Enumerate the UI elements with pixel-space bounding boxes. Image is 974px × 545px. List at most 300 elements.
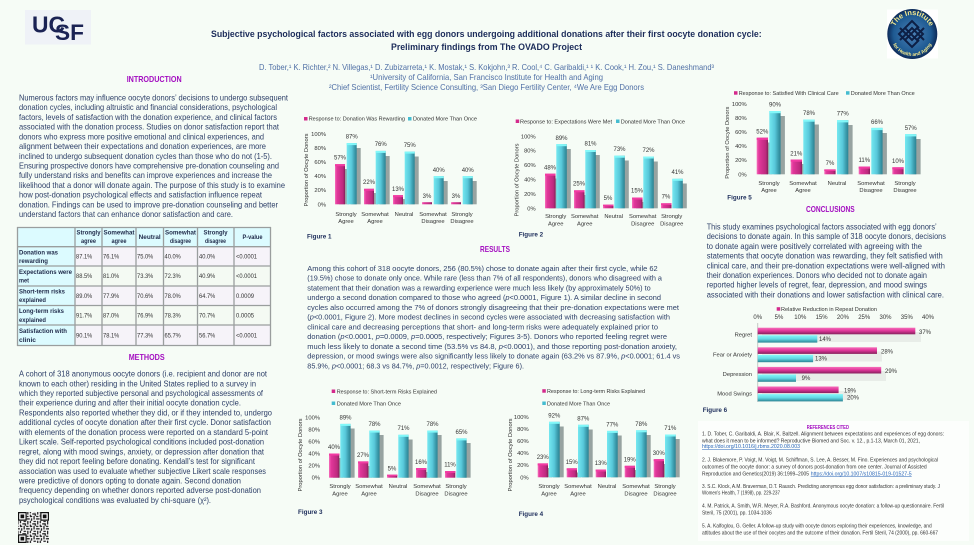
text: introduction: alignment between their expectations and donation experiences, are more bbox=[19, 142, 266, 151]
text: methods: frequency depending on whether donors reported adverse post-donation bbox=[19, 486, 261, 495]
logo: The Institute for Health and Aging: for Health and Aging bbox=[893, 43, 932, 56]
text: methods: known to each other) residing in the United States replied to a survey in bbox=[19, 379, 256, 388]
text: references: outcomes of the oocyte donor: a survey of donors post-donation from one center. Journal of Assisted bbox=[702, 465, 927, 471]
bar chart: figure 2: 72% bbox=[642, 148, 655, 154]
table: agreement vs repeat donation: P-value bbox=[242, 234, 263, 241]
bar chart: figure 6: Depression bbox=[723, 372, 752, 378]
bar chart: figure 1: 13% bbox=[392, 187, 405, 193]
bar chart: figure 2: Disagree bbox=[631, 222, 654, 228]
bar chart: figure 5: 90% bbox=[769, 102, 782, 108]
text: conclusions bbox=[707, 222, 946, 300]
text: methods: association was used to evaluate whether subjective Likert scale responses bbox=[19, 467, 266, 476]
text: conclusions: This study examines psychological factors associated with egg donors’ bbox=[707, 222, 937, 232]
bar chart: figure 4: Neutral bbox=[598, 484, 616, 490]
table: agreement vs repeat donation: 91.7% bbox=[76, 312, 93, 320]
text: results: clinical care and decreasing perceptions that short- and long-term risks were adequately explained prior to bbox=[307, 322, 658, 331]
bar chart: figure 1: 87% bbox=[346, 134, 358, 140]
bar chart: figure 6 bbox=[703, 307, 935, 414]
table: agreement vs repeat donation: 77.3% bbox=[137, 332, 154, 340]
text: methods: their experience during and after their initial oocyte donation cycle. bbox=[19, 399, 241, 408]
bar chart: figure 2: 73% bbox=[613, 147, 626, 153]
bar chart: figure 4: 100% bbox=[514, 415, 529, 421]
bar chart: figure 2: Disagree bbox=[660, 222, 683, 228]
table: agreement vs repeat donation: 0.0005 bbox=[236, 312, 254, 320]
text: references: 4. M. Patrick, A. Smith, W.R. Meyer, R.A. Bashford. Anonymous oocyte donation: a follow-up questionnaire. Fertil bbox=[702, 503, 944, 509]
bar chart: figure 4: 87% bbox=[577, 416, 590, 422]
bar chart: figure 3: Strongly bbox=[445, 484, 467, 490]
bar chart: figure 6: Fear or Anxiety bbox=[713, 352, 752, 358]
text: results: Among this cohort of 318 oocyte donors, 256 (80.5%) chose to donate again after their first cycle, while 62 bbox=[307, 264, 658, 273]
bar chart: figure 4: 13% bbox=[595, 461, 607, 467]
bar chart: figure 4: 19% bbox=[624, 458, 636, 464]
text: methods: they did not report feeling before donating. Kendall’s test for significant bbox=[19, 457, 256, 466]
bar chart: figure 3: 89% bbox=[339, 416, 352, 422]
table: agreement vs repeat donation: 75.0% bbox=[137, 254, 154, 260]
bar chart: figure 5: 11% bbox=[859, 158, 871, 164]
table: agreement vs repeat donation: 40.0% bbox=[164, 254, 181, 260]
text: introduction: inclined to undergo subsequent donation cycles than those who do not (1-5). bbox=[19, 152, 272, 161]
text: introduction: donors who express more positive emotional and clinical experiences, and bbox=[19, 132, 264, 141]
bar chart: figure 5: 7% bbox=[826, 161, 835, 167]
bar chart: figure 1: Proportion of Oocyte Donors bbox=[304, 133, 310, 206]
text: methods: Respondents also reported whether they did, or if they intended to, undergo bbox=[19, 408, 273, 417]
heading: conclusions: CONCLUSIONS bbox=[806, 205, 855, 214]
text: results: donation (p<0.0001, p=0.0009, p=0.0005, respectively; Figures 3-5). Donors who reported feeling regret were bbox=[307, 332, 667, 341]
bar chart: figure 5: Strongly bbox=[758, 181, 780, 187]
bar chart: figure 2: 15% bbox=[631, 188, 644, 194]
text: methods: additional cycles of oocyte donation after their first cycle. Donor satisfaction bbox=[19, 418, 271, 427]
authors and affiliations: D. Tober,¹ K. Richter,² N. Villegas,¹ D. Zubizarreta,¹ K. Mostak,¹ S. Kokjohn,³ R. Cool,⁴ C. Garibaldi,¹ ¹ K. Cook,¹ H. Zou,¹ S. Daneshmand³ bbox=[259, 63, 714, 72]
authors and affiliations bbox=[259, 63, 714, 92]
bar chart: figure 5: Disagree bbox=[859, 188, 883, 194]
table: agreement vs repeat donation: clinic bbox=[19, 337, 37, 344]
text: references: Women's Health, 7 (1998), pp. 229-237 bbox=[702, 490, 780, 496]
bar chart: figure 4: 77% bbox=[606, 422, 619, 428]
table: agreement vs repeat donation: 76.1% bbox=[103, 254, 120, 260]
bar chart: figure 6: 10% bbox=[794, 315, 807, 321]
bar chart: figure 1: Disagree bbox=[450, 219, 474, 225]
bar chart: figure 3: 80% bbox=[308, 427, 320, 433]
bar chart: figure 4: Somewhat bbox=[622, 484, 650, 490]
bar chart: figure 4: 92% bbox=[548, 414, 561, 420]
bar chart: figure 6: 28% bbox=[881, 350, 894, 356]
bar chart: figure 6: Mood Swings bbox=[717, 392, 752, 398]
table: agreement vs repeat donation: 78.3% bbox=[164, 312, 181, 320]
bar chart: figure 5: Somewhat bbox=[789, 181, 817, 187]
bar chart: figure 4: Disagree bbox=[624, 492, 648, 498]
legend: figure 3: Donated More Than Once bbox=[337, 401, 401, 407]
text: methods: with elements of the donation process were reported on a standard 5-point bbox=[18, 428, 269, 437]
table: agreement vs repeat donation: explained bbox=[19, 297, 46, 304]
bar chart: figure 4: Agree bbox=[541, 492, 557, 498]
title bbox=[211, 29, 762, 52]
bar chart: figure 3: Neutral bbox=[389, 484, 407, 490]
legend: figure 1 bbox=[304, 117, 477, 123]
bar chart: figure 3: 11% bbox=[444, 462, 456, 468]
bar chart: figure 5: 10% bbox=[892, 159, 905, 165]
text: methods: which they reported subjective personal and psychological assessments of bbox=[18, 389, 264, 398]
bar chart: figure 3: 65% bbox=[455, 430, 468, 436]
text: methods: Likert scale. Self-reported psychological conditions included post-donation bbox=[19, 438, 264, 447]
text: results: 85.9%, p<0.0001; 68.3 vs 84.7%, p=0.0012, respectively; Figure 6). bbox=[307, 361, 524, 370]
table: agreement vs repeat donation: 87.0% bbox=[103, 312, 120, 320]
bar chart: figure 1: Strongly bbox=[335, 212, 357, 218]
bar chart: figure 5: 100% bbox=[732, 102, 747, 108]
table: agreement vs repeat donation: 78.1% bbox=[103, 332, 120, 340]
table: agreement vs repeat donation: Long-term risks bbox=[19, 308, 64, 315]
bar chart: figure 3: 40% bbox=[308, 452, 320, 458]
text: results: (p<0.0001, Figure 2). More modest declines in second cycles were associated with decreasing satisfaction with bbox=[307, 313, 670, 322]
text: conclusions: associated with their donations and lower satisfaction with clinical care. bbox=[707, 290, 944, 300]
icon: QR code bbox=[18, 512, 49, 543]
bar chart: figure 4: 23% bbox=[537, 455, 549, 461]
table: agreement vs repeat donation: 0.0009 bbox=[236, 293, 254, 300]
bar chart: figure 2: 48% bbox=[544, 166, 557, 172]
text: introduction: donation. Findings can be used to improve pre-donation counseling and better bbox=[19, 200, 278, 209]
table: agreement vs repeat donation: 64.7% bbox=[199, 293, 216, 300]
table: agreement vs repeat donation: 40.0% bbox=[199, 254, 216, 260]
bar chart: figure 5: 0% bbox=[738, 172, 747, 178]
bar chart: figure 4: 0% bbox=[520, 475, 529, 481]
text: references bbox=[702, 432, 944, 536]
bar chart: figure 3 bbox=[298, 389, 471, 516]
bar chart: figure 1: Agree bbox=[367, 219, 383, 225]
references background bbox=[698, 421, 969, 541]
bar chart: figure 4: 15% bbox=[566, 460, 578, 466]
text: references: attitudes about the use of their oocytes and the outcome of their donation. Fertil Steril, 74 (2000), pp. 660-667 bbox=[702, 530, 938, 536]
text: references: https://doi.org/10.1007/s10815-019-01527-5 bbox=[811, 471, 912, 477]
bar chart: figure 6: 35% bbox=[901, 315, 913, 321]
logo: The Institute for Health and Aging: The Institute bbox=[890, 10, 933, 26]
bar chart: figure 4: 78% bbox=[635, 422, 648, 428]
heading: results: RESULTS bbox=[480, 245, 510, 254]
bar chart: figure 4: Strongly bbox=[654, 484, 676, 490]
bar chart: figure 6: 14% bbox=[819, 337, 832, 343]
table: agreement vs repeat donation: <0.0001 bbox=[236, 332, 257, 340]
bar chart: figure 5: 52% bbox=[756, 130, 769, 136]
bar chart: figure 4: 20% bbox=[517, 463, 529, 469]
heading: references cited: REFERENCES CITED bbox=[807, 425, 849, 431]
title: Subjective psychological factors associated with egg donors undergoing additional donations after their first oocyte donation cycle: bbox=[211, 29, 762, 39]
table: agreement vs repeat donation: rewarding bbox=[19, 258, 48, 265]
legend: figure 6: Relative Reduction in Repeat Donation bbox=[781, 307, 877, 313]
bar chart: figure 1: 40% bbox=[314, 174, 326, 180]
table: agreement vs repeat donation: 87.1% bbox=[76, 254, 93, 260]
bar chart: figure 1: 40% bbox=[462, 168, 474, 174]
bar chart: figure 1: 40% bbox=[433, 168, 445, 174]
logo: The Institute for Health and Aging bbox=[887, 9, 938, 59]
bar chart: figure 4: 80% bbox=[517, 427, 529, 433]
bar chart: figure 5: Disagree bbox=[893, 188, 917, 194]
bar chart: figure 2: Agree bbox=[577, 222, 592, 228]
text: conclusions: to donate again were positively correlated with agreeing with the bbox=[707, 242, 922, 251]
bar chart: figure 1: Disagree bbox=[421, 219, 445, 225]
table: agreement vs repeat donation: 78.0% bbox=[164, 293, 181, 300]
bar chart: figure 1: Agree bbox=[338, 219, 354, 225]
bar chart: figure 5: 21% bbox=[790, 152, 803, 158]
table: agreement vs repeat donation: 65.7% bbox=[164, 332, 181, 340]
bar chart: figure 6: 37% bbox=[919, 330, 932, 336]
text: introduction: how post-donation psychological effects and satisfaction influence repeat bbox=[19, 191, 263, 200]
bar chart: figure 3: Somewhat bbox=[355, 484, 383, 490]
text: references: Steril, 75 (2001), pp. 1034-1036 bbox=[702, 510, 772, 516]
table: agreement vs repeat donation: 40.9% bbox=[199, 273, 216, 280]
bar chart: figure 6: 20% bbox=[837, 315, 850, 321]
bar chart: figure 3: Disagree bbox=[444, 492, 468, 498]
bar chart: figure 3: 16% bbox=[415, 460, 428, 466]
table: agreement vs repeat donation: 56.7% bbox=[199, 332, 216, 340]
legend: figure 4: Response to: Long-term Risks Explained bbox=[547, 389, 645, 395]
bar chart: figure 6: 5% bbox=[775, 315, 784, 321]
bar chart: figure 5: 80% bbox=[735, 116, 747, 122]
legend: figure 4: Donated More Than Once bbox=[547, 401, 610, 407]
bar chart: figure 5: 66% bbox=[871, 120, 884, 126]
bar chart: figure 3: 0% bbox=[312, 476, 320, 482]
bar chart: figure 2: Neutral bbox=[604, 214, 623, 220]
bar chart: figure 3: 78% bbox=[426, 422, 439, 428]
bar chart: figure 4: Agree bbox=[570, 492, 586, 498]
bar chart: figure 5: Agree bbox=[795, 188, 811, 194]
authors and affiliations: ²Chief Scientist, Fertility Science Consulting, ³San Diego Fertility Center, ⁴We Are Egg Donors bbox=[329, 83, 644, 92]
text: references: 2. J. Blakemore, P. Voigt, M. Voigt, M. Schiffman, S. Lee, A. Besser, M. Fino. Experiences and psychological bbox=[702, 458, 938, 464]
bar chart: figure 3: 60% bbox=[308, 439, 320, 445]
text: introduction: associated with the donation process. Studies on donor satisfaction report that bbox=[19, 123, 280, 132]
table: agreement vs repeat donation: agree bbox=[112, 238, 127, 245]
table: agreement vs repeat donation: 81.0% bbox=[103, 273, 120, 280]
text: introduction bbox=[19, 94, 289, 219]
bar chart: figure 4: Somewhat bbox=[564, 484, 592, 490]
bar chart: figure 1: 80% bbox=[314, 146, 326, 152]
table: agreement vs repeat donation: disagree bbox=[205, 238, 226, 245]
bar chart: figure 3: Strongly bbox=[329, 484, 351, 490]
text: introduction: factors, levels of satisfaction with the donation experience, and clinical factors bbox=[19, 113, 277, 122]
table: agreement vs repeat donation: 77.9% bbox=[103, 293, 120, 300]
text: references: https://doi.org/10.1016/j.rbms.2020.08.003 bbox=[702, 444, 800, 450]
bar chart: figure 1: 20% bbox=[314, 188, 326, 194]
text: introduction: Numerous factors may influence oocyte donors’ decisions to undergo subsequent bbox=[19, 94, 289, 102]
bar chart: figure 2: 80% bbox=[524, 149, 536, 155]
text: references: what does it mean to be informed? Reproductive Biomed and Soc. v. 12., p.1-13, March 01, 2021, bbox=[702, 438, 920, 444]
table: agreement vs repeat donation: explained bbox=[19, 317, 46, 324]
logo: UCSF bbox=[25, 10, 91, 45]
table: agreement vs repeat donation: 73.3% bbox=[137, 273, 154, 280]
bar chart: figure 2: Somewhat bbox=[629, 214, 657, 220]
text: results: much less likely to donate a second time (53.5% vs 84.8, p<0.0001), and those reporting post-donation anxiety, bbox=[307, 342, 677, 351]
legend: figure 2: Donated More Than Once bbox=[621, 119, 685, 125]
table: agreement vs repeat donation: Strongly bbox=[204, 230, 228, 236]
table: agreement vs repeat donation: agree bbox=[81, 238, 96, 245]
bar chart: figure 2: 5% bbox=[604, 196, 613, 202]
text: methods: regret, along with mood swings, anxiety, or depression after donation that bbox=[19, 447, 265, 456]
text: results: statement that their donation was a rewarding experience were much less likely (by approximately 50%) to bbox=[307, 284, 651, 292]
bar chart: figure 5: 78% bbox=[803, 111, 816, 117]
legend: figure 3 bbox=[332, 389, 437, 407]
bar chart: figure 1: 3% bbox=[423, 194, 432, 200]
bar chart: figure 6: 0% bbox=[753, 315, 763, 321]
table: agreement vs repeat donation: 70.6% bbox=[137, 293, 154, 300]
bar chart: figure 1: 100% bbox=[311, 132, 326, 138]
table: agreement vs repeat donation: Donation was bbox=[19, 250, 58, 256]
text: conclusions: reported higher levels of regret, fear, depression, and mood swings bbox=[707, 281, 927, 290]
bar chart: figure 5 bbox=[725, 91, 921, 202]
bar chart: figure 1: Figure 1 bbox=[307, 233, 332, 240]
logo: UCSF: UC bbox=[32, 12, 65, 38]
bar chart: figure 4: Disagree bbox=[653, 492, 677, 498]
bar chart: figure 4: 60% bbox=[517, 439, 529, 445]
text: references: 3. S.C. Klock, A.M. Braverman, D.T. Rausch. Predicting anonymous egg donor satisfaction: a preliminary study. J bbox=[702, 484, 940, 490]
table: agreement vs repeat donation: 72.3% bbox=[164, 273, 181, 280]
table: agreement vs repeat donation: 89.0% bbox=[76, 293, 93, 300]
legend: figure 5: Donated More Than Once bbox=[851, 91, 915, 97]
table: agreement vs repeat donation: Somewhat bbox=[165, 230, 197, 236]
bar chart: figure 3: 100% bbox=[305, 415, 320, 421]
bar chart: figure 3: Agree bbox=[361, 492, 377, 498]
text: introduction: understand factors that can enhance donor satisfaction and care. bbox=[19, 210, 233, 219]
text: introduction: likelihood that a donor will donate again. The purpose of this study is to examine bbox=[19, 181, 285, 190]
bar chart: figure 6: Figure 6 bbox=[703, 407, 728, 414]
bar chart: figure 2: Strongly bbox=[545, 214, 566, 220]
bar chart: figure 1: 75% bbox=[404, 143, 416, 149]
bar chart: figure 3: Somewhat bbox=[413, 484, 441, 490]
bar chart: figure 3: Figure 3 bbox=[298, 509, 323, 516]
bar chart: figure 2: Somewhat bbox=[571, 214, 599, 220]
table: agreement vs repeat donation: Expectations were bbox=[19, 269, 72, 276]
bar chart: figure 5: 20% bbox=[735, 158, 747, 164]
bar chart: figure 6: 30% bbox=[879, 315, 892, 321]
bar chart: figure 2: Proportion of Oocyte Donors bbox=[515, 143, 521, 216]
bar chart: figure 6: Regret bbox=[735, 333, 752, 339]
bar chart: figure 5: 40% bbox=[735, 144, 747, 150]
text: methods: psychological conditions was evaluated by chi-square (χ²). bbox=[19, 496, 211, 505]
bar chart: figure 2: Agree bbox=[548, 222, 563, 228]
bar chart: figure 1: 60% bbox=[314, 160, 326, 166]
bar chart: figure 2: 0% bbox=[527, 206, 536, 212]
table: agreement vs repeat donation: 90.1% bbox=[76, 332, 93, 340]
bar chart: figure 2: 81% bbox=[584, 142, 597, 148]
legend: figure 2 bbox=[516, 119, 685, 125]
text: results: cycles also occurred among the 7% of donors strongly disagreeing that their pre-donation expectations were met bbox=[307, 303, 680, 312]
authors and affiliations: ¹University of California, San Francisco Institute for Health and Aging bbox=[370, 73, 603, 82]
bar chart: figure 5: Neutral bbox=[828, 181, 846, 187]
bar chart: figure 1: Somewhat bbox=[361, 212, 389, 218]
bar chart: figure 5: 77% bbox=[837, 112, 849, 118]
bar chart: figure 2: 60% bbox=[524, 163, 536, 169]
table: agreement vs repeat donation: disagree bbox=[170, 238, 191, 245]
text: methods: A cohort of 318 anonymous oocyte donors (i.e. recipient and donor are not bbox=[19, 370, 268, 378]
bar chart: figure 1: 0% bbox=[318, 202, 326, 208]
bar chart: figure 4: 30% bbox=[653, 451, 665, 457]
bar chart: figure 4: Strongly bbox=[538, 484, 560, 490]
bar chart: figure 6: 19% bbox=[844, 388, 857, 394]
bar chart: figure 3: 5% bbox=[388, 466, 397, 472]
bar chart: figure 1: 76% bbox=[375, 142, 387, 148]
text: references: 1. D. Tober, C. Garibaldi, A. Blair, K. Baltzell. Alignment between expectations and experiences of egg donors: bbox=[702, 432, 944, 438]
logo: UCSF: SF bbox=[55, 20, 84, 45]
text: conclusions: clinical care, and their pre-donation expectations were well-aligned with bbox=[707, 261, 945, 270]
bar chart: figure 1: Strongly bbox=[451, 212, 473, 218]
bar chart: figure 4: Proportion of Oocyte Donors bbox=[508, 418, 514, 492]
bar chart: figure 2: 20% bbox=[524, 192, 536, 198]
table: agreement vs repeat donation: Neutral bbox=[139, 234, 161, 241]
legend: figure 5 bbox=[734, 91, 915, 97]
bar chart: figure 6: 13% bbox=[815, 356, 828, 362]
bar chart: figure 3: Agree bbox=[332, 492, 348, 498]
bar chart: figure 5: Figure 5 bbox=[727, 194, 752, 202]
bar chart: figure 3: 27% bbox=[357, 453, 370, 459]
bar chart: figure 3: 20% bbox=[308, 464, 320, 470]
bar chart: figure 5: 57% bbox=[905, 126, 917, 132]
table: agreement vs repeat donation: <0.0001 bbox=[236, 273, 257, 280]
bar chart: figure 5: Agree bbox=[761, 188, 777, 194]
bar chart: figure 1 bbox=[304, 117, 477, 240]
bar chart: figure 2: 40% bbox=[524, 178, 536, 184]
bar chart: figure 3: Proportion of Oocyte Donors bbox=[298, 418, 304, 492]
text: references: Reproduction and Genetics(2019) 36:1999–2005 bbox=[702, 471, 809, 477]
bar chart: figure 4 bbox=[508, 389, 680, 518]
text: results: undergo a second donation compared to those who agreed (p<0.0001, Figure 1). A similar decline in second bbox=[307, 293, 661, 302]
heading: introduction: INTRODUCTION bbox=[127, 75, 182, 84]
bar chart: figure 1: 3% bbox=[452, 194, 461, 200]
bar chart: figure 2: 7% bbox=[662, 194, 671, 200]
bar chart: figure 3: 40% bbox=[328, 445, 341, 451]
bar chart: figure 5: Somewhat bbox=[857, 181, 885, 187]
table: agreement vs repeat donation bbox=[17, 227, 271, 346]
text: conclusions: statements that oocyte donation was rewarding, they felt satisfied with bbox=[707, 252, 943, 261]
bar chart: figure 6: 20% bbox=[847, 396, 860, 402]
heading: methods: METHODS bbox=[129, 353, 165, 362]
text: methods: were predictive of donors opting to donate again. Second donation bbox=[18, 476, 241, 486]
bar chart: figure 1: Neutral bbox=[395, 212, 413, 218]
legend: figure 3: Response to: Short-term Risks Explained bbox=[337, 389, 437, 395]
bar chart: figure 4: 40% bbox=[517, 451, 529, 457]
legend: figure 4 bbox=[542, 389, 645, 407]
bar chart: figure 4: 71% bbox=[664, 426, 677, 432]
text: results: (19.5%) chose to donate only once. While rare (less than 7% of all respondents), donors who disagreed with a bbox=[307, 274, 663, 283]
table: agreement vs repeat donation: Somewhat bbox=[104, 230, 135, 236]
bar chart: figure 4: Figure 4 bbox=[519, 511, 544, 518]
text: conclusions: their donation experiences. Donors who decided not to donate again bbox=[707, 271, 927, 280]
text: introduction: Ensuring prospective donors have comprehensive pre-donation counseling and bbox=[19, 162, 279, 170]
table: agreement vs repeat donation: Satisfaction with bbox=[19, 328, 67, 335]
bar chart: figure 1: 57% bbox=[334, 156, 347, 162]
table: agreement vs repeat donation: 88.5% bbox=[76, 273, 93, 280]
bar chart: figure 1: Somewhat bbox=[419, 212, 447, 218]
bar chart: figure 5: Proportion of Oocyte Donors bbox=[725, 107, 731, 179]
text: references: 5. A. Kalfoglou, G. Geller. A follow-up study with oocyte donors exploring their experiences, knowledge, and bbox=[702, 524, 932, 530]
bar chart: figure 3: 78% bbox=[368, 422, 381, 428]
table: agreement vs repeat donation: met bbox=[19, 278, 30, 284]
bar chart: figure 3: 71% bbox=[397, 426, 410, 432]
bar chart: figure 6: 15% bbox=[816, 315, 828, 321]
legend: figure 1: Donated More Than Once bbox=[413, 117, 477, 123]
text: results: depression, or mood swings were also significantly less likely to donate again (63.2% vs 87.9%, p<0.0001; 61.4 vs bbox=[307, 352, 680, 361]
legend: figure 1: Response to: Donation Was Rewarding bbox=[309, 117, 405, 123]
bar chart: figure 6: 40% bbox=[922, 315, 935, 321]
table: agreement vs repeat donation: Strongly bbox=[76, 230, 101, 236]
text: introduction: fully understand risks and benefits can improve experiences and increase the bbox=[19, 171, 272, 180]
text: introduction: donation cycles, including altruistic and financial considerations, psychological bbox=[19, 103, 277, 112]
bar chart: figure 2: 41% bbox=[671, 170, 684, 176]
bar chart: figure 2 bbox=[515, 119, 687, 238]
table: agreement vs repeat donation: <0.0001 bbox=[236, 254, 257, 260]
bar chart: figure 5: Strongly bbox=[894, 181, 916, 187]
bar chart: figure 2: Figure 2 bbox=[519, 232, 544, 238]
bar chart: figure 2: 25% bbox=[573, 182, 586, 188]
bar chart: figure 3: Disagree bbox=[415, 492, 439, 498]
text: methods bbox=[18, 370, 273, 505]
bar chart: figure 6: 29% bbox=[885, 369, 898, 375]
table: agreement vs repeat donation: Short-term risks bbox=[19, 288, 65, 296]
